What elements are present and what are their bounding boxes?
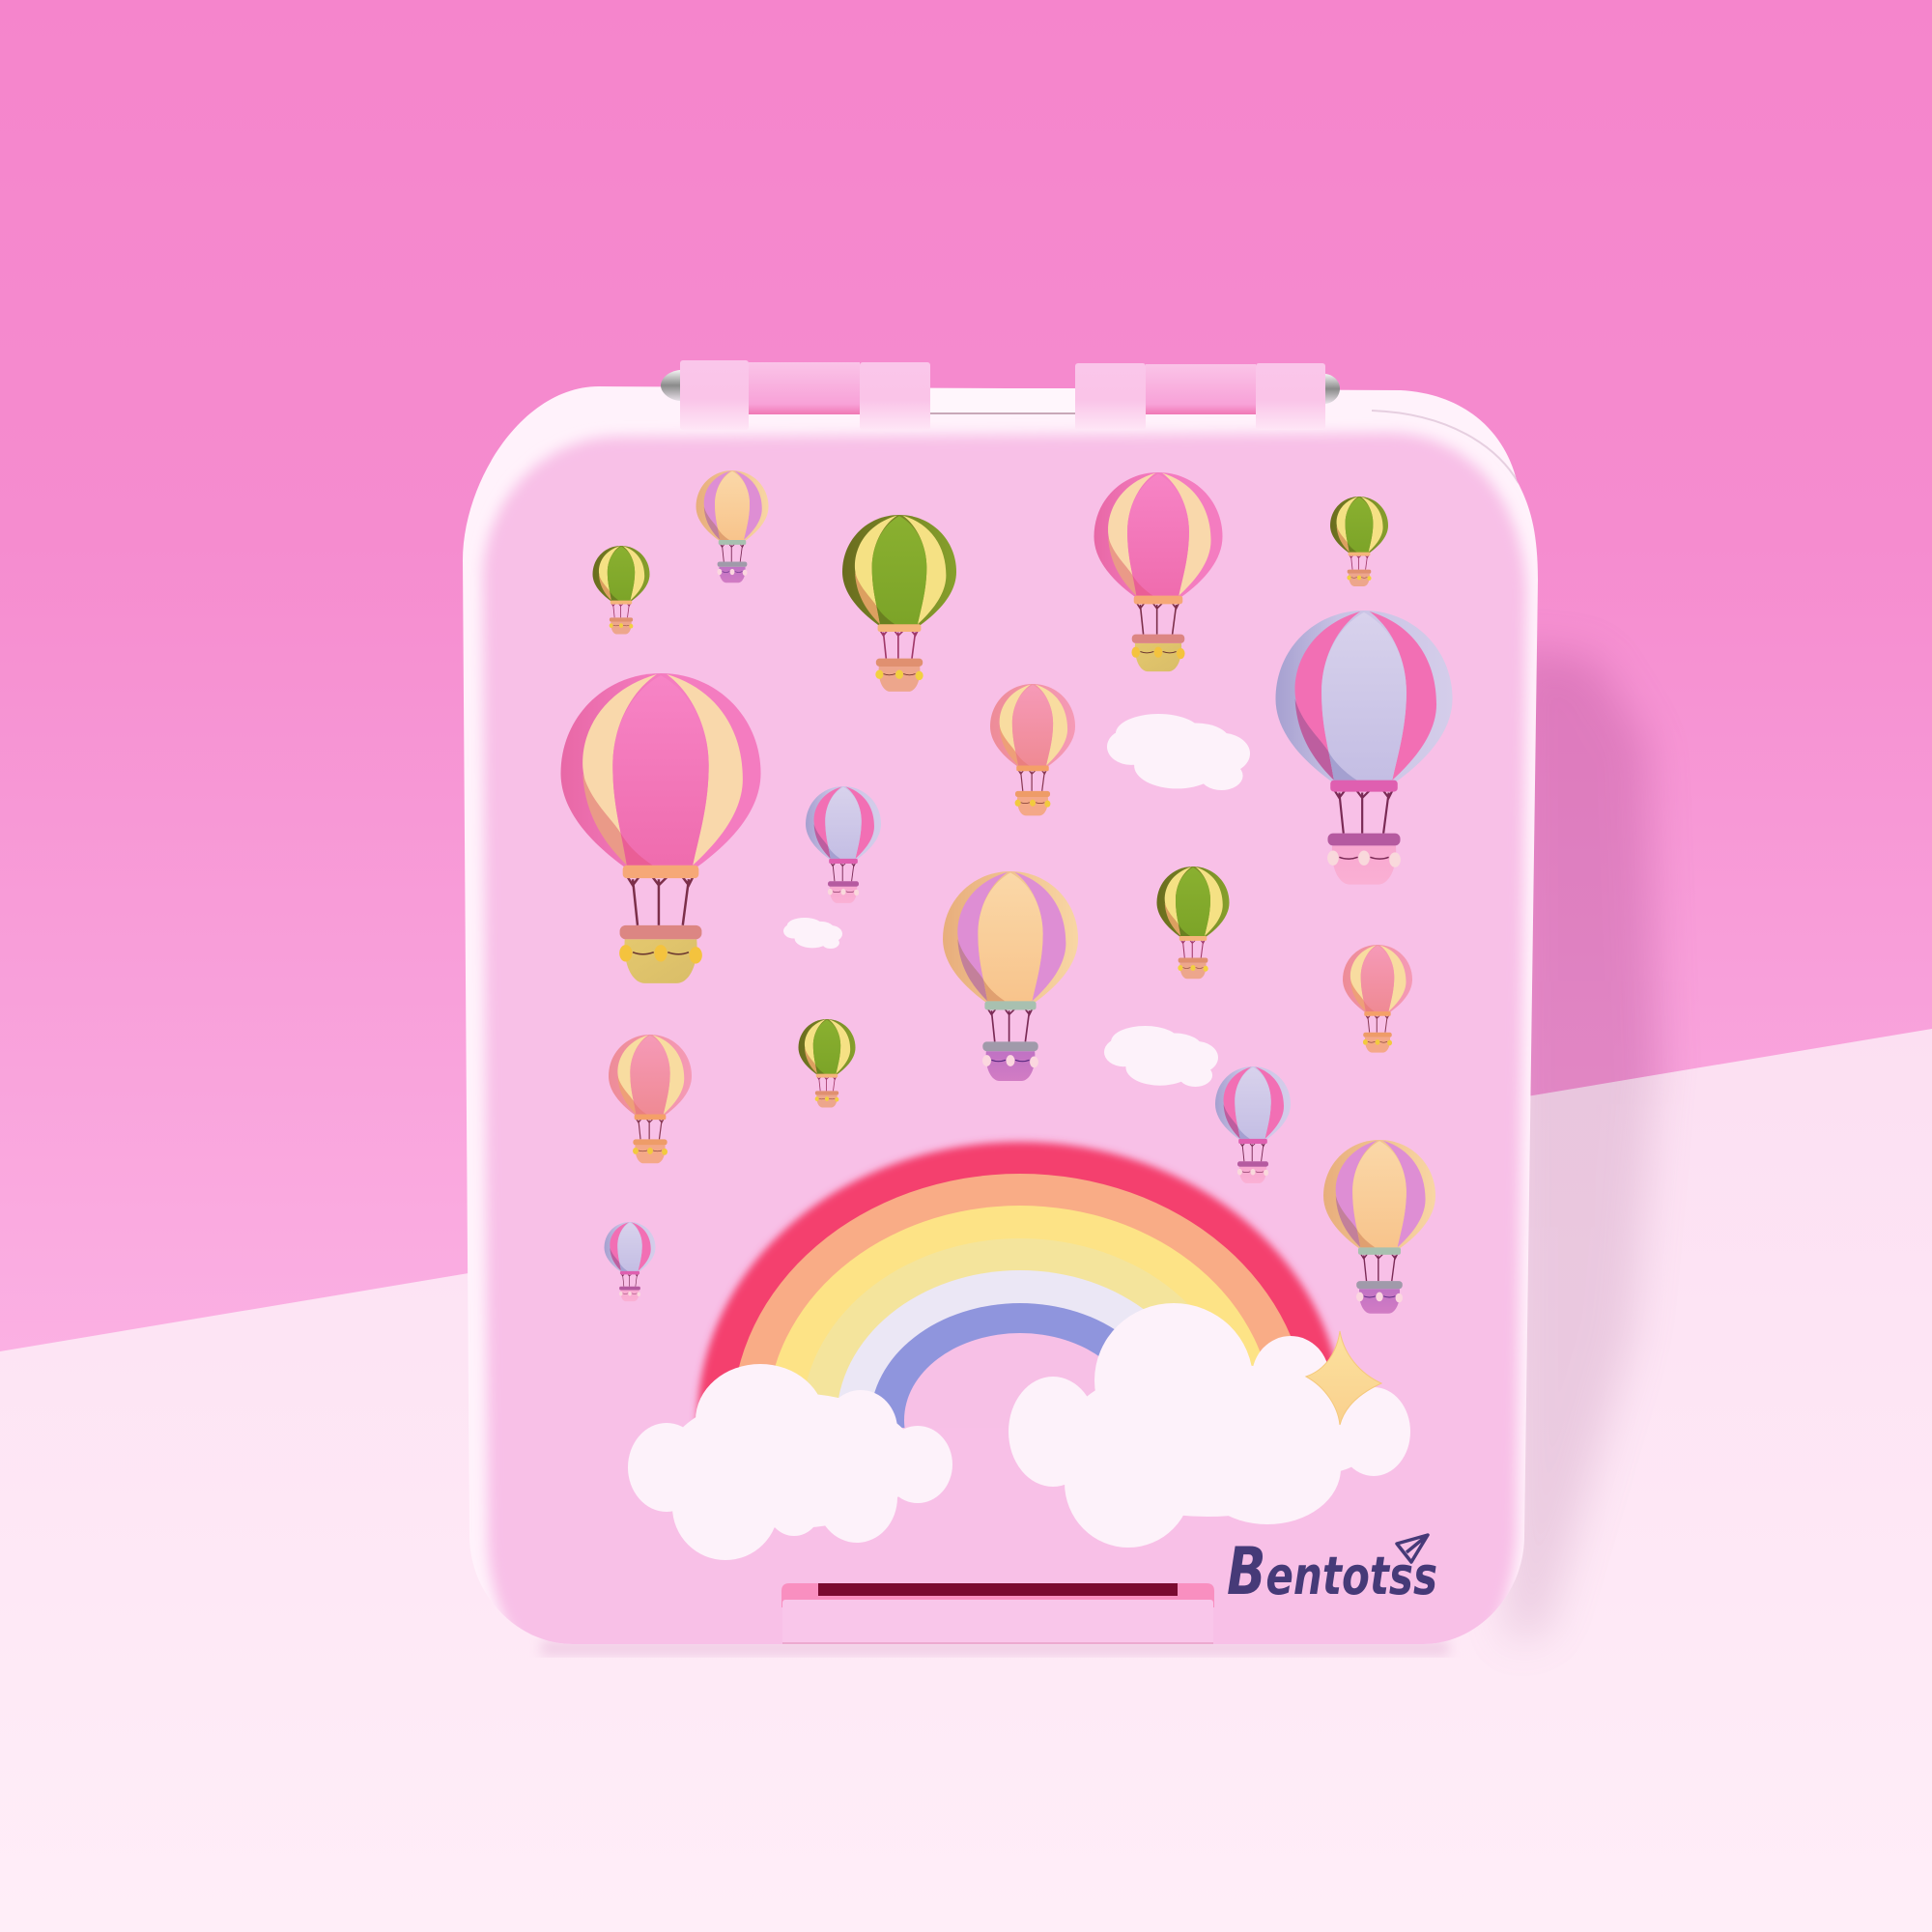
balloon: large green: [842, 515, 956, 692]
box body and lid: [454, 382, 1546, 1671]
gold star: [1306, 1331, 1381, 1425]
balloon: small blue lower right: [1215, 1066, 1291, 1183]
balloon: salmon right: [1343, 945, 1412, 1053]
cast shadow on wall: [1530, 641, 1673, 1095]
small cloud middle: [1104, 1026, 1218, 1087]
rainbow: [692, 1136, 1336, 1428]
shell gap between hinges: [930, 388, 1075, 414]
balloon: small green top right: [1330, 497, 1388, 586]
balloon: small blue bottom left: [605, 1222, 655, 1301]
background floor: [0, 1029, 1932, 1932]
right rainbow cloud: [1009, 1303, 1410, 1548]
balloon: small blue left: [806, 786, 881, 903]
logo: [1227, 1534, 1437, 1610]
balloon: salmon centre: [990, 684, 1075, 815]
balloon: small green lower left: [798, 1019, 856, 1107]
balloon: large pink left: [560, 673, 761, 983]
balloon: pink top right: [1094, 472, 1223, 671]
balloon: salmon left: [609, 1035, 692, 1163]
balloon: purple lower right: [1323, 1140, 1435, 1314]
left hinge: [661, 360, 930, 430]
balloon: small green top left: [593, 546, 649, 634]
balloon: purple centre: [943, 871, 1078, 1081]
small cloud upper right: [1107, 714, 1250, 790]
tiny cloud left: [783, 918, 842, 949]
balloon: small purple top: [696, 470, 769, 582]
cast shadow on floor: [1497, 1073, 1666, 1642]
left rainbow cloud: [628, 1364, 952, 1560]
logo wordmark: Bentotss: [1227, 1534, 1437, 1610]
bottom contact shadow: [541, 1640, 1449, 1656]
balloon: green centre right: [1157, 867, 1229, 979]
right hinge: [1075, 363, 1340, 430]
lunch box: [454, 360, 1546, 1698]
balloon: large blue: [1275, 611, 1453, 885]
latch: [781, 1583, 1214, 1644]
icon: paper plane: [1397, 1535, 1428, 1562]
background wall: [0, 0, 1932, 1352]
